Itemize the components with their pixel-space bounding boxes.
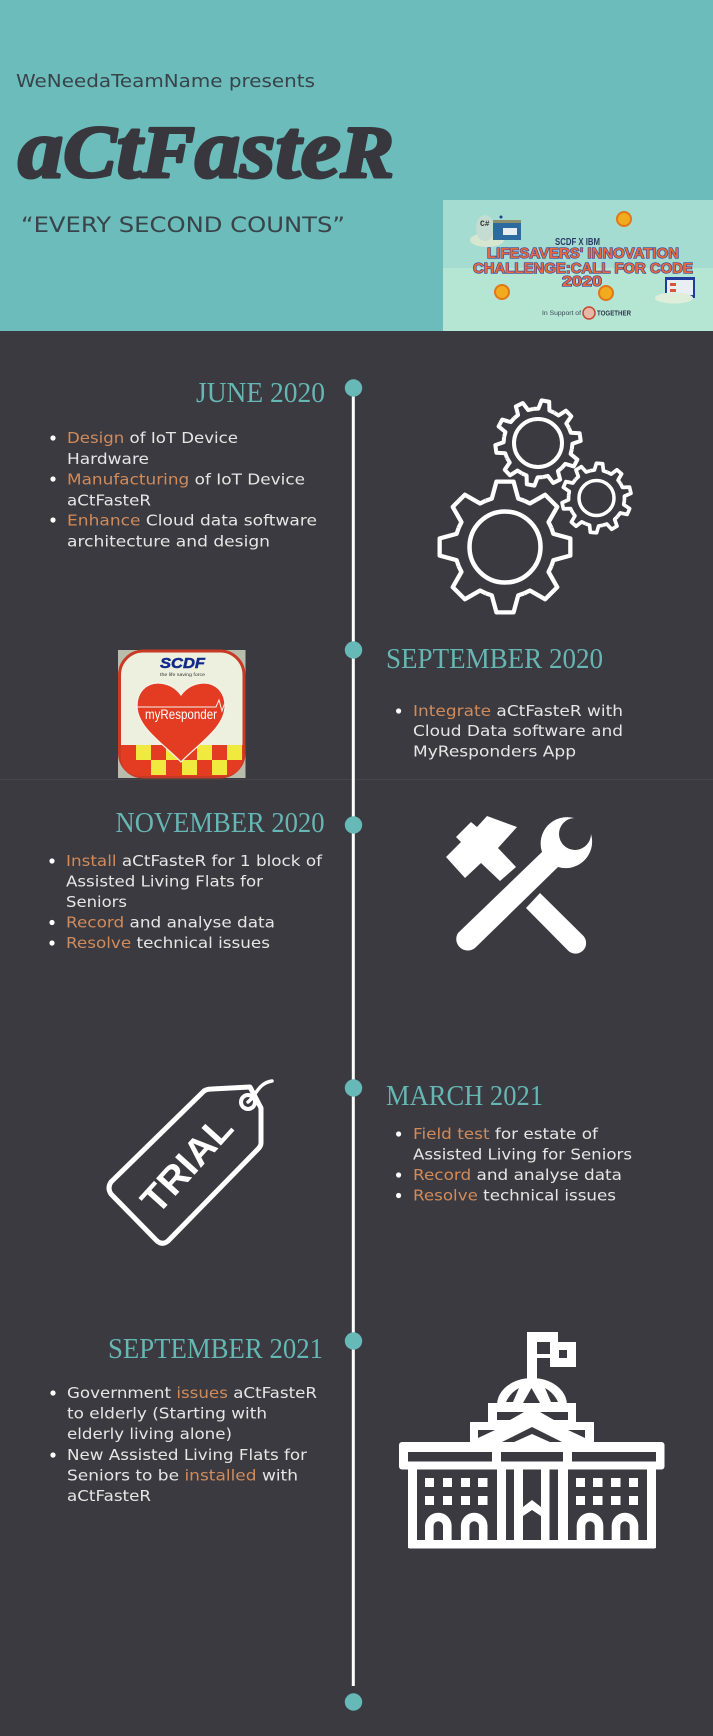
banner title lines: 2020 <box>562 274 602 290</box>
task list <box>50 429 317 550</box>
task list: Assisted Living for Seniors <box>413 1146 632 1164</box>
title: aCtFasteR: aCtFasteR <box>18 103 394 196</box>
heading: SEPTEMBER 2021 <box>108 1334 323 1365</box>
task list <box>396 702 623 760</box>
task list <box>49 852 323 952</box>
header panel <box>0 0 713 331</box>
pulse line <box>137 700 227 711</box>
walls and columns <box>408 1469 656 1548</box>
task list: Record and analyse data <box>413 1166 622 1184</box>
task list: elderly living alone) <box>67 1425 232 1443</box>
icon: gears <box>440 393 635 612</box>
task list: MyResponders App <box>413 742 576 760</box>
heart <box>137 683 225 762</box>
task list: Install aCtFasteR for 1 block of <box>66 852 323 870</box>
banner title lines <box>473 246 693 290</box>
milestone: September 2020 <box>386 644 623 760</box>
task list: Design of IoT Device <box>67 429 238 447</box>
task list: to elderly (Starting with <box>67 1404 267 1422</box>
icon: hammer and wrench <box>446 816 592 954</box>
task list: Resolve technical issues <box>66 934 270 952</box>
SCDF strapline: the life saving force <box>160 672 206 677</box>
task list <box>396 1125 632 1204</box>
task list: architecture and design <box>67 532 270 550</box>
heading: MARCH 2021 <box>386 1081 543 1112</box>
code window illustration: C# <box>480 220 490 229</box>
milestone dots <box>345 379 362 1711</box>
dashboard window illustration <box>655 277 695 304</box>
flag <box>527 1332 576 1380</box>
challenge banner image <box>443 200 713 331</box>
timeline axis <box>345 379 362 1711</box>
milestone: September 2021 <box>50 1334 323 1505</box>
heading: SEPTEMBER 2020 <box>386 644 603 675</box>
banner heading: SCDF X IBM <box>555 236 600 248</box>
task list: Enhance Cloud data software <box>67 512 317 530</box>
central door <box>523 1500 541 1516</box>
task list <box>50 1384 317 1505</box>
checker strip <box>121 745 243 776</box>
coins <box>495 212 631 300</box>
hammer head <box>446 816 517 881</box>
code window illustration <box>470 215 521 247</box>
milestone: June 2020 <box>50 378 325 550</box>
entablature <box>399 1442 664 1470</box>
task list: Government issues aCtFasteR <box>67 1384 317 1402</box>
task list: Seniors <box>66 893 127 911</box>
tag label: TRIAL <box>133 1108 242 1222</box>
task list: Cloud Data software and <box>413 722 623 740</box>
presenter line: WeNeedaTeamName presents <box>16 71 315 92</box>
task list: Seniors to be installed with <box>67 1466 298 1484</box>
task list: Resolve technical issues <box>413 1186 616 1204</box>
task list: Hardware <box>67 450 149 468</box>
task list: Field test for estate of <box>413 1125 599 1143</box>
task list: Integrate aCtFasteR with <box>413 702 623 720</box>
milestone: November 2020 <box>49 808 325 952</box>
icon: myResponder app <box>118 650 246 778</box>
tagline: “EVERY SECOND COUNTS” <box>21 213 345 237</box>
task list: New Assisted Living Flats for <box>67 1446 308 1464</box>
heading: NOVEMBER 2020 <box>116 808 324 839</box>
hammer handle <box>526 893 586 954</box>
SCDF logo text: SCDF <box>160 655 206 672</box>
wrench <box>456 817 592 951</box>
banner footer <box>542 307 631 319</box>
arches <box>429 1517 634 1544</box>
task list: aCtFasteR <box>67 492 151 510</box>
task list: Assisted Living Flats for <box>66 872 264 890</box>
task list: Record and analyse data <box>66 914 275 932</box>
banner footer: In Support of <box>542 310 581 317</box>
task list: aCtFasteR <box>67 1487 151 1505</box>
banner title lines: CHALLENGE:CALL FOR CODE <box>473 261 693 277</box>
icon: government building <box>399 1332 664 1548</box>
task list: Manufacturing of IoT Device <box>67 470 305 488</box>
heading: JUNE 2020 <box>196 378 325 409</box>
milestone: March 2021 <box>386 1081 632 1204</box>
windows <box>425 1478 638 1505</box>
icon: trial tag <box>109 1081 272 1243</box>
tiers and pediment <box>470 1403 594 1444</box>
app name: myResponder <box>145 706 217 722</box>
banner footer: TOGETHER <box>597 310 631 318</box>
banner title lines: LIFESAVERS' INNOVATION <box>487 246 679 262</box>
dome <box>497 1378 567 1405</box>
